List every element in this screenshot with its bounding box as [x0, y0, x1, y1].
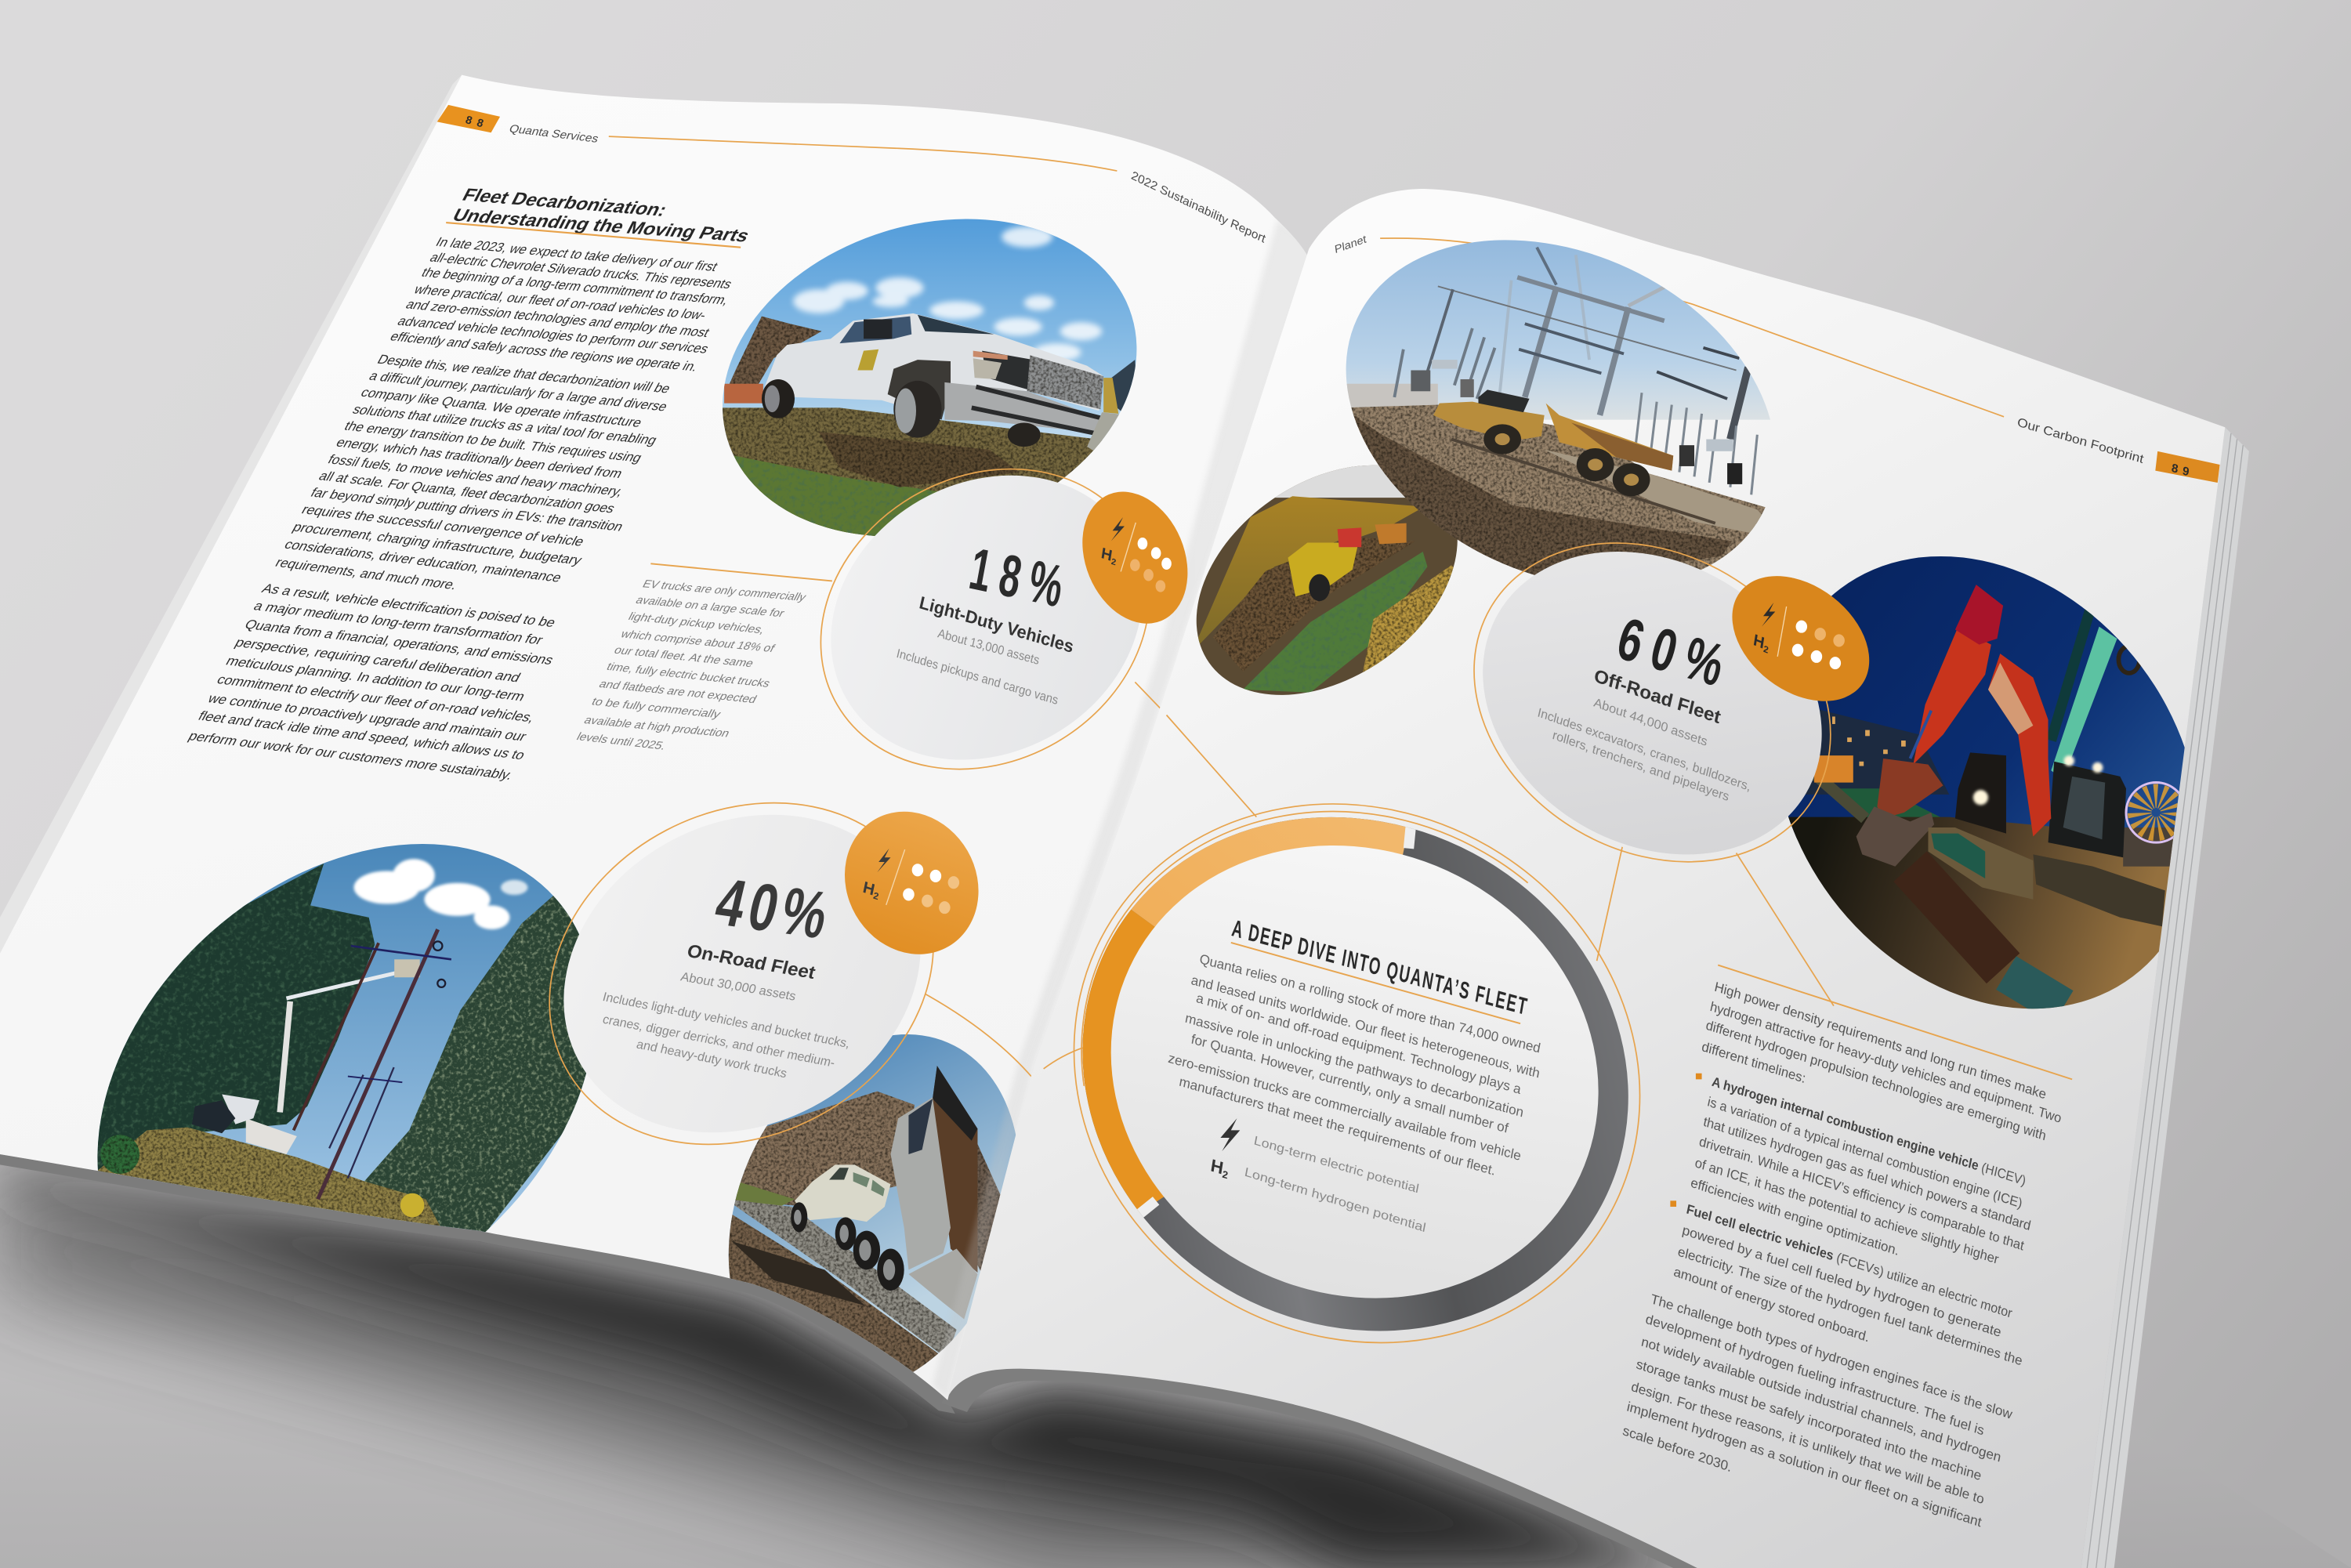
- body text: left column: a major medium to long-term transformation for: [252, 599, 546, 647]
- badge: on-road potential: H: [861, 878, 876, 900]
- bullet: FCEV: [1670, 1200, 1676, 1207]
- 60% figure: 60%: [1610, 606, 1731, 700]
- side note: EV trucks: [574, 563, 832, 752]
- right page sheet: [947, 189, 2225, 1568]
- thin outer ring: [975, 701, 1739, 1445]
- photo: excavator at night: [1739, 540, 2234, 1034]
- icon: hydrogen: 2: [1222, 1168, 1229, 1181]
- body text: left column: all at scale. For Quanta, fleet decarbonization goes: [317, 469, 618, 516]
- badge: light-duty potential: 2: [1110, 557, 1117, 567]
- photo: dump truck on gravel: [729, 1034, 1016, 1372]
- body text: left column: Quanta from a financial, operations, and emissions: [242, 617, 556, 668]
- tracks: [1928, 827, 2033, 900]
- panel: left page: and zero-emission technologies and employ the most: [403, 297, 712, 340]
- badge: on-road potential: 2: [872, 890, 880, 902]
- body text: left column: far beyond simply putting drivers in EVs: the transition: [308, 485, 626, 534]
- light-duty assets: About 13,000 assets: [936, 625, 1041, 667]
- panel: right page: [900, 189, 2234, 1568]
- running header: Quanta Services: Quanta Services: [507, 122, 600, 145]
- panel: right page: massive role in unlocking the pathways to decarbonization: [1184, 1010, 1525, 1120]
- steel structures: [1394, 248, 1757, 494]
- donut legend: [1209, 1118, 1427, 1235]
- panel: right page: a mix of on- and off-road equipment. Technology plays a: [1195, 990, 1523, 1097]
- panel: right page: zero-emission trucks are commercially available from vehicle: [1167, 1051, 1522, 1164]
- stat panel: 18% light-duty vehicles: [766, 411, 1207, 827]
- donut legend: Long-term hydrogen potential: [1244, 1164, 1427, 1235]
- panel: left page: advanced vehicle technologies to perform our services: [395, 314, 712, 356]
- on-road description: cranes, digger derricks, and other medium-: [601, 1012, 837, 1070]
- hydrogen text block: amount of energy stored onboard.: [1672, 1264, 1871, 1345]
- panel: left page: all-electric Chevrolet Silverado trucks. This represents: [427, 250, 734, 292]
- off-road description: Includes excavators, cranes, bulldozers,: [1536, 705, 1752, 794]
- side note: EV trucks: which comprise about 18% of: [618, 628, 777, 655]
- badge: off-road potential: 2: [1762, 643, 1770, 656]
- book drop shadow: [0, 1172, 1694, 1568]
- hydrogen text block: scale before 2030.: [1621, 1424, 1733, 1476]
- body text: left column: commitment to electrify our fleet of on-road vehicles,: [214, 672, 538, 725]
- side note: EV trucks: time, fully electric bucket trucks: [604, 661, 772, 690]
- icon: lightning bolt: [1220, 1118, 1240, 1151]
- hydrogen text block: Fuel cell electric vehicles (FCEVs) utilize an electric motor: [1685, 1201, 2013, 1321]
- body text: left column: requirements, and much more.: [273, 556, 460, 592]
- panel: right page: manufacturers that meet the requirements of our fleet.: [1178, 1074, 1497, 1179]
- left page sheet: [0, 75, 1313, 1400]
- title: [446, 185, 753, 248]
- panel: left page: [0, 75, 1317, 1409]
- page tab: 88: [437, 105, 500, 132]
- running header: Our Carbon Footprint: Our Carbon Footprint: [2016, 416, 2146, 467]
- segment gaps: [1102, 795, 1414, 1244]
- donut legend: Long-term electric potential: [1253, 1133, 1420, 1196]
- body text: left column: [186, 234, 734, 783]
- excavator boom: [1988, 654, 2051, 836]
- truck body: [765, 313, 1103, 418]
- body text: left column: the energy transition to be built. This requires using: [342, 418, 645, 465]
- on-road assets: About 30,000 assets: [679, 970, 797, 1004]
- photo: white pickup truck: [723, 219, 1136, 536]
- panel: right page: Quanta relies on a rolling stock of more than 74,000 owned: [1198, 951, 1541, 1056]
- donut: fleet breakdown: [900, 701, 1739, 1445]
- stat panel: 60% off-road fleet: [1415, 480, 1889, 925]
- connector: light-duty ring toward gutter: [1135, 682, 1172, 721]
- page tab: 88: 88: [464, 114, 485, 130]
- orange segments: on-road 40%: [900, 769, 1422, 1349]
- title: Understanding the Moving Parts: [449, 205, 753, 246]
- photo: substation with hauler: [1346, 240, 1770, 575]
- running header: 2022 Sustainability Report: 2022 Sustainability Report: [1129, 168, 1268, 246]
- pipeline: [1814, 773, 1865, 818]
- off-road assets: About 44,000 assets: [1592, 696, 1708, 749]
- on-road description: and heavy-duty work trucks: [635, 1037, 788, 1081]
- body text: left column: fossil fuels, to move vehicles and heavy machinery,: [325, 452, 626, 498]
- header rule: [609, 136, 1117, 171]
- side note: EV trucks: available on a large scale for: [633, 594, 787, 620]
- photo: bucket truck and power poles: [97, 844, 586, 1232]
- badge: off-road potential: [1708, 550, 1893, 727]
- body text: left column: procurement, charging infrastructure, budgetary: [290, 520, 585, 567]
- body text: left column: meticulous planning. In addition to our long-term: [223, 654, 527, 704]
- badge: off-road potential: H: [1752, 632, 1766, 653]
- page tab: 89: 89: [2171, 462, 2190, 479]
- body text: left column: perform our work for our customers more sustainably.: [186, 729, 516, 783]
- connector: on-road to dump truck: [925, 994, 1038, 1084]
- on-road label: On-Road Fleet: [685, 940, 818, 983]
- panel: left page: the beginning of a long-term commitment to transform,: [419, 266, 731, 308]
- off-road description: rollers, trenchers, and pipelayers: [1551, 727, 1730, 804]
- articulated hauler: [1433, 402, 1545, 440]
- donut heading: A DEEP DIVE INTO QUANTA’S FLEET: [1230, 915, 1529, 1020]
- body text: left column: solutions that utilize trucks as a vital tool for enabling: [350, 402, 660, 447]
- off-road description: [1536, 705, 1752, 804]
- header rule right: [1380, 238, 2004, 417]
- body text: left column: a difficult journey, particularly for a large and diverse: [367, 368, 671, 414]
- stat panel: 40% on-road fleet: [490, 737, 993, 1210]
- body text: left column: fleet and track idle time and speed, which allows us to: [196, 708, 527, 762]
- connector: off-road to text: [1737, 853, 1834, 1006]
- 40% figure: 40%: [709, 864, 835, 952]
- donut body text: [1167, 951, 1541, 1179]
- panel: left page: efficiently and safely across the regions we operate in.: [387, 329, 701, 374]
- gutter shading: [933, 219, 1317, 1400]
- bullet: HICEV: [1696, 1074, 1702, 1079]
- page tab: 89: [2155, 451, 2220, 483]
- badge: on-road potential: [819, 787, 1004, 979]
- title: Fleet Decarbonization:: [459, 185, 671, 220]
- body text: left column: company like Quanta. We operate infrastructure: [358, 385, 645, 430]
- light-duty description: Includes pickups and cargo vans: [895, 646, 1060, 708]
- icon: hydrogen: H: [1209, 1156, 1225, 1179]
- connector: gutter arc to donut: [1044, 1048, 1082, 1069]
- light-duty label: Light-Duty Vehicles: [918, 592, 1076, 657]
- hydrogen text block: different timelines:: [1701, 1039, 1807, 1087]
- body text: left column: we continue to proactively upgrade and maintain our: [205, 691, 529, 744]
- side note: EV trucks: our total fleet. At the same: [612, 644, 755, 670]
- donut centre: [1037, 767, 1672, 1377]
- ferris wheel: [2126, 783, 2186, 842]
- on-road description: Includes light-duty vehicles and bucket trucks,: [601, 990, 852, 1051]
- panel: right page: and leased units worldwide. Our fleet is heterogeneous, with: [1190, 972, 1541, 1081]
- on-road description: [601, 990, 852, 1081]
- body text: left column: perspective, requiring careful deliberation and: [233, 635, 523, 685]
- body text: left column: In late 2023, we expect to take delivery of our first: [433, 234, 721, 274]
- body text: left column: requires the successful convergence of vehicle: [299, 502, 587, 549]
- off-road label: Off-Road Fleet: [1592, 665, 1723, 728]
- photo: corn field trencher: [1196, 465, 1458, 695]
- side note: EV trucks: and flatbeds are not expected: [597, 678, 759, 706]
- badge: light-duty potential: [1063, 476, 1207, 639]
- side note: EV trucks: EV trucks are only commercially: [640, 578, 808, 603]
- side note: EV trucks: available at high production: [581, 714, 732, 740]
- excavator cabs: [1955, 752, 2006, 834]
- badge: light-duty potential: H: [1100, 545, 1114, 565]
- side note: EV trucks: to be fully commercially: [589, 695, 724, 720]
- body text: left column: where practical, our fleet of on-road vehicles to low-: [411, 282, 709, 322]
- 18% figure: 18%: [965, 536, 1068, 620]
- connector: off-road to donut: [1597, 847, 1622, 961]
- body text: left column: energy, which has traditionally been derived from: [334, 435, 625, 481]
- side note: EV trucks: light-duty pickup vehicles,: [626, 610, 767, 636]
- body text: left column: considerations, driver education, maintenance: [282, 537, 564, 585]
- hydrogen text block: efficiencies with engine optimization.: [1690, 1175, 1900, 1258]
- body text: left column: Despite this, we realize that decarbonization will be: [375, 352, 673, 396]
- body text: left column: As a result, vehicle electrification is poised to be: [259, 581, 559, 630]
- connector: light-duty ring to donut: [1167, 715, 1256, 817]
- running header: Planet: Planet: [1334, 234, 1367, 256]
- gray segment: off-road 60%: [991, 722, 1719, 1426]
- panel: right page: for Quanta. However, currently, only a small number of: [1190, 1031, 1510, 1136]
- side note: EV trucks: levels until 2025.: [574, 730, 668, 752]
- hydrogen text block: [1621, 965, 2072, 1530]
